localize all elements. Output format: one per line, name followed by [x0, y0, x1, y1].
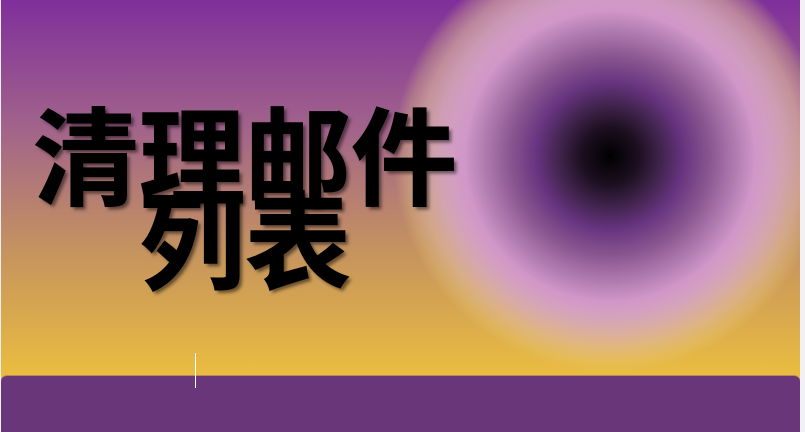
radial glow circle — [393, 0, 805, 373]
title line 2: 列表 — [139, 186, 351, 304]
title — [33, 102, 458, 304]
text cursor — [195, 353, 196, 388]
title line 1: 清理邮件 — [33, 102, 457, 220]
bottom band — [1, 375, 800, 432]
